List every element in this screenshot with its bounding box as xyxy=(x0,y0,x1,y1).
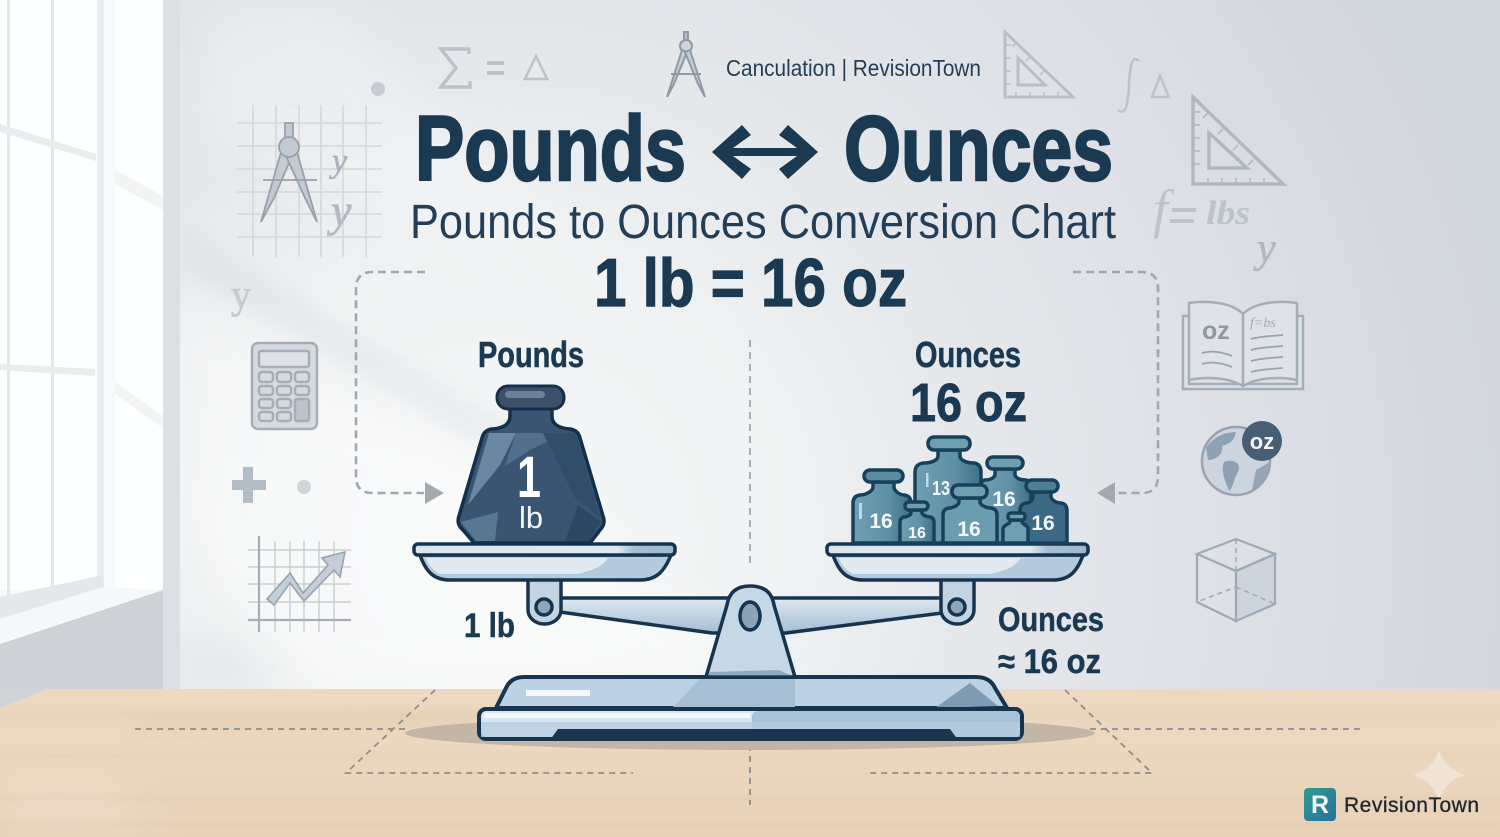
icon: plus sign xyxy=(232,467,266,503)
icon: compass on grid with y symbols: y xyxy=(327,185,352,236)
scale base xyxy=(479,677,1022,740)
centre dashed divider xyxy=(749,340,751,568)
main title: Pounds xyxy=(415,98,686,200)
table shadow xyxy=(405,716,1095,750)
header text: Canculation | RevisionTown xyxy=(726,55,981,81)
icon: large set square xyxy=(1193,97,1283,184)
dashed connector left xyxy=(356,272,444,504)
weight tall 13: 13 xyxy=(932,478,950,500)
balance scale xyxy=(405,544,1095,750)
icon: y symbol left: y xyxy=(231,272,251,317)
weight tiny right xyxy=(1003,513,1028,543)
main title: Ounces xyxy=(844,98,1113,200)
ounces right label: Ounces xyxy=(998,601,1104,639)
icon: rising line chart xyxy=(248,536,351,632)
right pan xyxy=(827,544,1088,580)
floor dashed guide lines xyxy=(135,690,1365,805)
central pillar xyxy=(706,586,795,677)
weight front centre: 16 xyxy=(957,518,981,541)
icon: f equals lbs formula: f xyxy=(1153,179,1175,239)
subtitle: Pounds to Ounces Conversion Chart xyxy=(410,196,1116,249)
left pan post xyxy=(528,578,561,624)
right pan post xyxy=(941,578,974,624)
beam arms xyxy=(560,598,942,633)
weight small left: 16 xyxy=(908,525,926,542)
logo: RevisionTown: RevisionTown xyxy=(1344,794,1479,817)
formula: 1 lb = 16 oz xyxy=(594,245,907,321)
weight far right xyxy=(1020,480,1067,543)
icon: f equals lbs formula: lbs xyxy=(1206,195,1250,232)
decorative sparkle xyxy=(1413,750,1465,800)
main title xyxy=(415,98,1113,200)
icon: open book: oz xyxy=(1202,317,1230,345)
weight left: 16 xyxy=(869,510,893,533)
large 1 lb weight: 1 xyxy=(517,445,541,510)
icon: open book xyxy=(1183,302,1303,389)
wooden table xyxy=(0,689,1500,837)
large 1 lb weight xyxy=(458,386,604,543)
icon: integral and delta xyxy=(1118,59,1169,112)
icon: header compass xyxy=(667,32,705,97)
weight tall 13 xyxy=(915,437,981,543)
ounces label: Ounces xyxy=(915,334,1021,375)
icon: decorative dot xyxy=(371,82,385,96)
icon: calculator xyxy=(252,343,317,429)
small ounce weights xyxy=(853,437,1067,543)
dashed connector right xyxy=(1073,272,1158,504)
window xyxy=(0,0,180,690)
icon: compass on grid with y symbols xyxy=(237,105,382,257)
icon: compass on grid with y symbols: y xyxy=(329,143,348,180)
left pan xyxy=(414,544,675,580)
weight small left xyxy=(900,502,934,543)
icon: cube xyxy=(1197,539,1275,621)
weight front centre xyxy=(943,485,997,543)
double arrow xyxy=(712,125,818,179)
weight back right: 16 xyxy=(992,488,1016,511)
icon: y symbol right: y xyxy=(1253,226,1276,272)
icon: f equals lbs formula xyxy=(1153,179,1250,239)
approx 16 oz label: ≈ 16 oz xyxy=(998,643,1101,681)
16 oz value: 16 oz xyxy=(910,373,1027,433)
pounds label: Pounds xyxy=(478,334,584,375)
logo: RevisionTown xyxy=(1304,788,1479,821)
weight far right: 16 xyxy=(1031,512,1055,535)
icon: decorative dot lower xyxy=(297,480,311,494)
1 lb left label: 1 lb xyxy=(464,607,515,645)
icon: globe with oz badge xyxy=(1202,421,1282,495)
icon: open book: f=bs xyxy=(1250,316,1276,331)
weight back right xyxy=(980,457,1031,543)
icon: globe with oz badge: oz xyxy=(1250,429,1274,454)
large 1 lb weight: lb xyxy=(519,500,543,535)
icon: small set square xyxy=(1005,32,1073,97)
weight left xyxy=(853,470,911,543)
icon: sigma equals delta formula xyxy=(441,49,547,87)
logo: RevisionTown: R xyxy=(1311,791,1329,819)
